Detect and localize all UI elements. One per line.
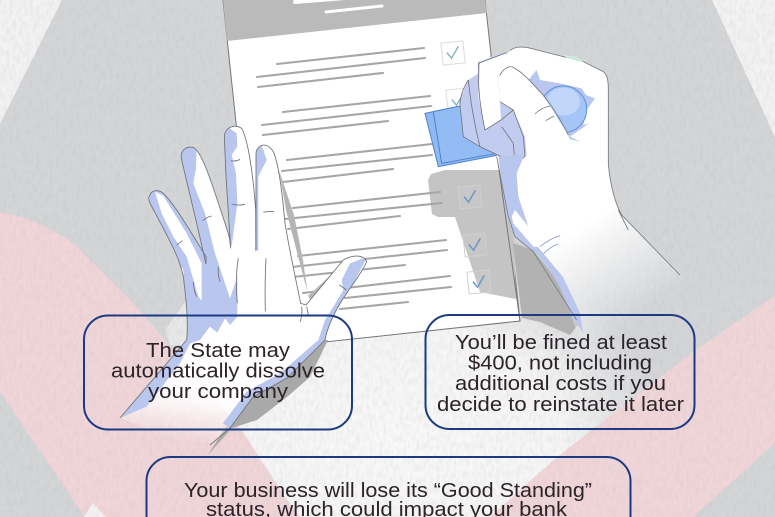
callout: dissolve company: automatically dissolve [111,360,325,382]
document sheet with checklist [223,0,520,349]
callout: dissolve company: The State may [146,340,290,362]
fingers shaded [459,52,527,163]
sheet [223,0,520,349]
background: light patch left of wrist [165,298,192,345]
background: left pink band [0,213,300,517]
sheet right edge over shadow [497,155,520,321]
background: bottom left white sliver [84,503,106,517]
finger highlight [478,53,507,130]
sheet header band [223,0,487,41]
cast shadows of hands on the table [208,170,580,455]
callout: fine: You’ll be fined at least [455,332,667,354]
icon: right hand holding stamp [425,47,700,363]
callout: fine: decide to reinstate it later [437,394,684,416]
callout: fine: $400, not including [468,352,652,374]
background: top left light corner [0,0,62,124]
callout: fine: additional costs if you [455,373,666,395]
stamp shadow on sheet [428,170,516,299]
checkbox 1 [441,41,465,65]
background: bottom right grey corner [693,443,775,517]
callout: good standing [146,457,630,517]
right arm shadow [513,243,580,335]
callout: good standing: Your business will lose its “Good Standing” [184,480,592,502]
thumb outline [498,67,568,135]
left arm shadow [208,340,328,455]
checklist text lines [257,48,451,309]
thumb [498,67,573,230]
wrist highlight [515,210,530,237]
wrist edge outline [497,157,577,320]
checkbox 2 [446,88,470,112]
callout: dissolve company: your company [148,381,288,403]
stamp knob shading [528,70,595,152]
callout: fine [426,315,694,429]
background: central light glow [100,230,700,517]
icon: left hand raised [120,125,367,455]
hand fill [120,126,367,455]
header title bars [295,0,382,12]
background: top right light corner [712,0,775,137]
stamp knob [540,86,587,133]
stamp base [425,106,498,167]
hand outline [510,47,680,275]
stamp knob highlight [547,88,580,116]
hand back and wrist fill [497,47,700,363]
checkbox 5 [467,270,491,294]
green ring hint [563,55,584,63]
checkbox 4 [463,233,487,257]
wrist blue shading [498,153,583,333]
checkbox 3 [458,185,482,209]
background: right pink band [490,296,775,517]
wrist tendon marks [540,236,560,254]
thumb over finger edge [498,67,520,110]
hand blue shading [120,125,367,428]
left hand shadow on sheet [279,170,350,304]
hand outline and creases [120,126,367,445]
callout: dissolve company [84,316,352,430]
finger outlines [460,53,525,163]
